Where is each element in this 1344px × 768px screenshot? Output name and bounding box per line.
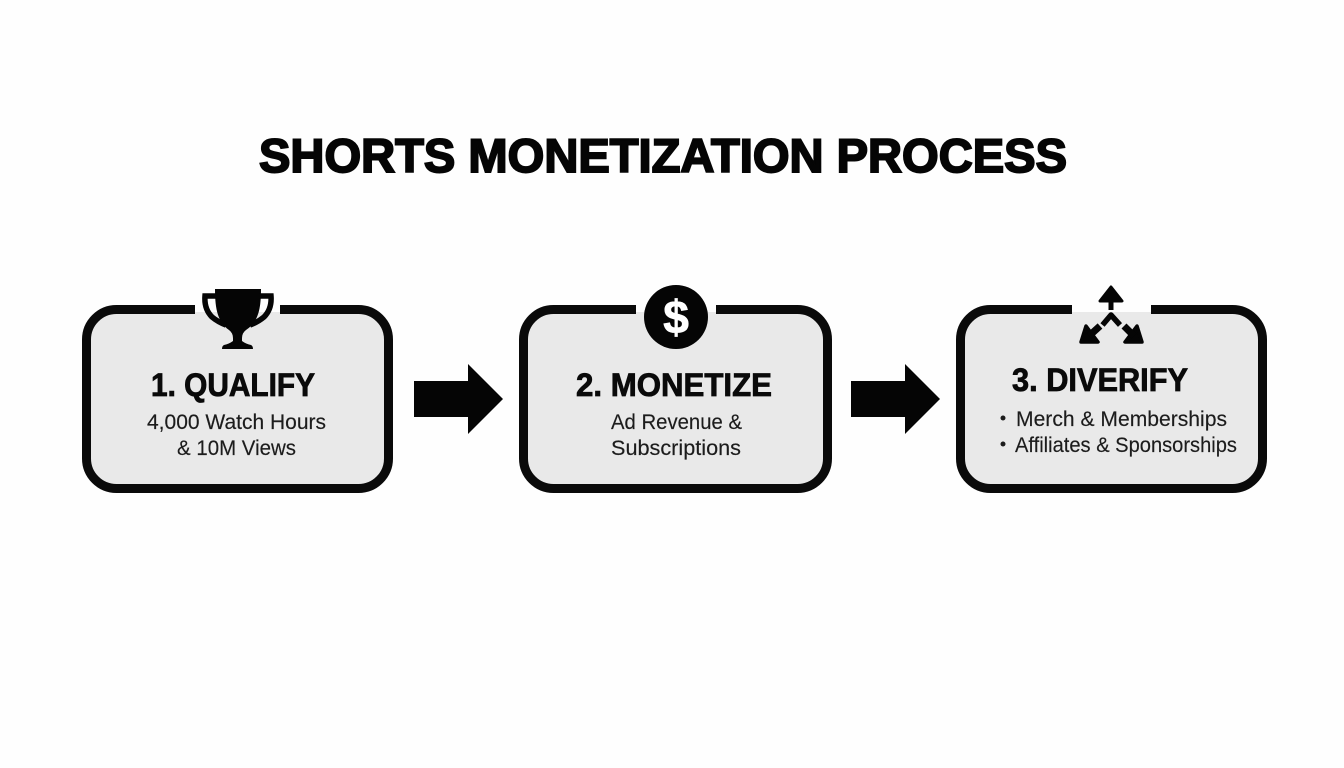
title: SHORTS MONETIZATION PROCESS	[259, 129, 1067, 182]
bullet list: Merch & Memberships	[1016, 407, 1227, 431]
step description	[147, 410, 326, 460]
step description: & 10M Views	[177, 436, 296, 460]
step heading: 3. DIVERIFY	[1012, 362, 1188, 398]
step heading: 1. QUALIFY	[151, 367, 315, 403]
icon: trophy	[205, 289, 271, 349]
step description	[611, 410, 742, 460]
panel: step 1 qualify	[86, 289, 388, 488]
panel: step 3 diversify	[960, 287, 1262, 488]
icon: dollar coin: $	[663, 291, 689, 343]
arrow: step 1 to step 2	[414, 364, 503, 434]
step heading: 2. MONETIZE	[576, 367, 772, 403]
icon: dollar coin	[644, 285, 708, 349]
step description: Ad Revenue &	[611, 410, 742, 434]
icon: diverging arrows	[1081, 287, 1142, 342]
panel: step 2 monetize	[524, 285, 828, 488]
arrow: step 2 to step 3	[851, 364, 940, 434]
step description: Subscriptions	[611, 436, 741, 460]
bullet list: Affiliates & Sponsorships	[1015, 433, 1237, 457]
bullet list	[1000, 407, 1237, 457]
step description: 4,000 Watch Hours	[147, 410, 326, 434]
